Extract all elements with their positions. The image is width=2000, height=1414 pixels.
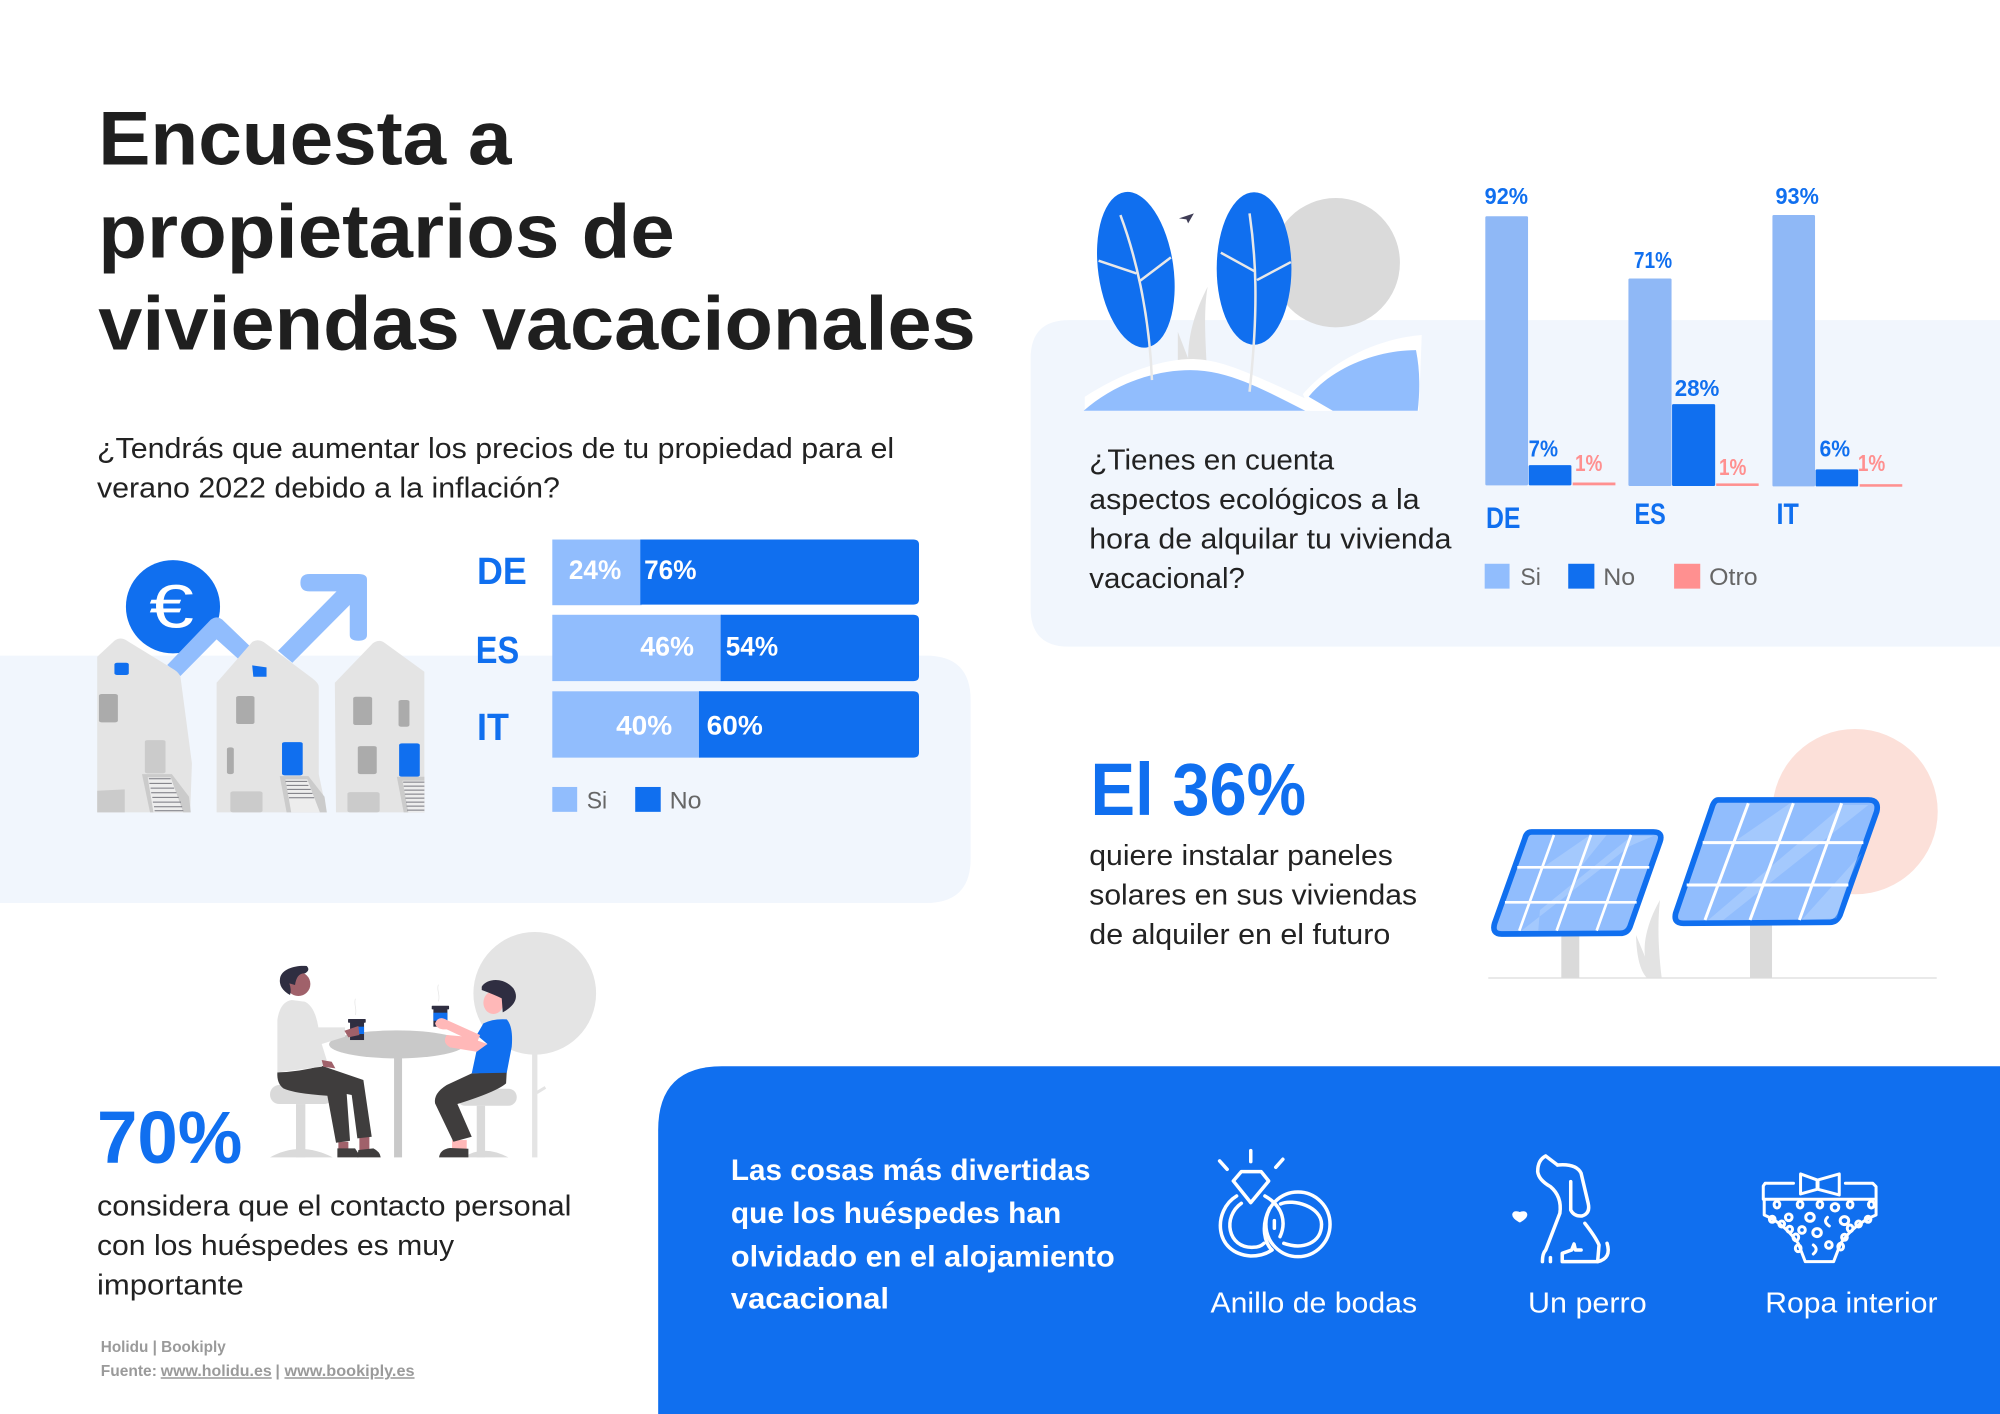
- stat: personal contact: 70%: [97, 1096, 242, 1179]
- group: DE: DE: [1486, 502, 1520, 535]
- stat: personal contact: considera que el contacto personal: [97, 1191, 571, 1223]
- footer: source: Holidu | Bookiply: [101, 1339, 226, 1356]
- group: ES: ES: [1635, 498, 1666, 531]
- legend: Si: [1520, 564, 1541, 591]
- question: price increase: ¿Tendrás que aumentar los precios de tu propiedad para el: [97, 433, 894, 465]
- group: ES: 28%: [1675, 375, 1719, 401]
- stat: solar panels: quiere instalar paneles: [1089, 840, 1393, 872]
- group: IT: 1%: [1858, 450, 1885, 476]
- group: DE: 7%: [1529, 436, 1558, 462]
- panel: forgotten items: [658, 1066, 2000, 1414]
- row: ES: ES: [476, 629, 519, 672]
- label: wedding ring: Anillo de bodas: [1210, 1287, 1417, 1319]
- title: propietarios de: [98, 190, 675, 275]
- icon: trees and hills: [1084, 187, 1422, 411]
- row: DE: 24%: [569, 555, 621, 585]
- heading: funniest forgotten things: Las cosas más divertidas: [731, 1154, 1091, 1187]
- icon: dog: [1514, 1156, 1608, 1262]
- heading: funniest forgotten things: olvidado en el alojamiento: [731, 1241, 1115, 1274]
- group: ES: [1628, 247, 1759, 531]
- row: IT: IT: [477, 706, 509, 749]
- stat: personal contact: importante: [97, 1270, 244, 1302]
- footer: source: |: [276, 1363, 280, 1380]
- stat: personal contact: con los huéspedes es muy: [97, 1230, 455, 1262]
- panel: right background: [1031, 320, 2000, 647]
- group: DE: [1485, 183, 1615, 535]
- illustration: two people at a table: [270, 932, 596, 1157]
- group: ES: 1%: [1719, 454, 1746, 480]
- title: viviendas vacacionales: [98, 281, 976, 366]
- question: ecological aspects: vacacional?: [1089, 563, 1245, 595]
- stat: personal contact: [97, 1096, 571, 1302]
- row: DE: 76%: [644, 555, 697, 585]
- person left: [277, 966, 381, 1157]
- icon: houses with euro and rising arrow: €: [149, 573, 194, 641]
- title: Encuesta a: [98, 97, 513, 182]
- tree: [473, 932, 596, 1157]
- legend: No: [670, 788, 702, 815]
- row: IT: 60%: [707, 711, 763, 741]
- footer: source: Fuente:: [101, 1363, 157, 1380]
- table: [329, 1030, 464, 1157]
- chart: price increase bars: [476, 540, 919, 815]
- row: ES: 54%: [726, 632, 778, 662]
- heading: funniest forgotten things: [731, 1154, 1115, 1316]
- row: ES: [476, 615, 919, 681]
- stat: solar panels: solares en sus viviendas: [1089, 879, 1417, 911]
- stat: solar panels: de alquiler en el futuro: [1089, 919, 1390, 951]
- legend: [552, 787, 702, 815]
- footer: source: www.holidu.es: [160, 1363, 272, 1380]
- row: DE: DE: [477, 550, 527, 593]
- legend: [1485, 564, 1758, 591]
- footer: source: www.bookiply.es: [283, 1363, 415, 1380]
- person right: [432, 980, 516, 1157]
- group: ES: 71%: [1634, 247, 1672, 273]
- question: ecological aspects: hora de alquilar tu vivienda: [1089, 523, 1452, 555]
- group: DE: 92%: [1485, 183, 1528, 209]
- panel: left background: [0, 656, 971, 903]
- legend: Otro: [1709, 564, 1758, 591]
- group: DE: 1%: [1575, 450, 1602, 476]
- icon: houses with euro and rising arrow: [97, 560, 424, 812]
- group: IT: IT: [1777, 498, 1799, 531]
- row: IT: 40%: [616, 711, 672, 741]
- heading: funniest forgotten things: que los huéspedes han: [731, 1197, 1061, 1230]
- question: price increase: verano 2022 debido a la inflación?: [97, 472, 560, 504]
- label: underwear: Ropa interior: [1765, 1287, 1938, 1319]
- icon: wedding rings: [1220, 1151, 1330, 1257]
- question: price increase: [97, 433, 894, 504]
- icon: underwear: [1763, 1174, 1876, 1262]
- question: ecological aspects: aspectos ecológicos a la: [1089, 484, 1420, 516]
- label: dog: Un perro: [1528, 1287, 1647, 1319]
- legend: No: [1603, 564, 1635, 591]
- footer: source: [101, 1339, 415, 1380]
- stools: [270, 1085, 517, 1157]
- legend: Si: [587, 788, 607, 815]
- group: IT: [1772, 183, 1902, 531]
- icon: solar panels: [1488, 729, 1938, 978]
- title: [98, 97, 976, 366]
- group: IT: 93%: [1775, 183, 1819, 209]
- row: DE: [477, 540, 919, 605]
- heading: funniest forgotten things: vacacional: [731, 1283, 889, 1316]
- question: ecological aspects: [1089, 444, 1452, 595]
- stat: solar panels: [1089, 748, 1417, 951]
- question: ecological aspects: ¿Tienes en cuenta: [1089, 444, 1334, 476]
- row: IT: [477, 691, 919, 758]
- chart: ecological bars: [1485, 183, 1902, 591]
- stat: solar panels: El 36%: [1091, 748, 1306, 831]
- group: IT: 6%: [1819, 436, 1850, 462]
- row: ES: 46%: [640, 632, 694, 662]
